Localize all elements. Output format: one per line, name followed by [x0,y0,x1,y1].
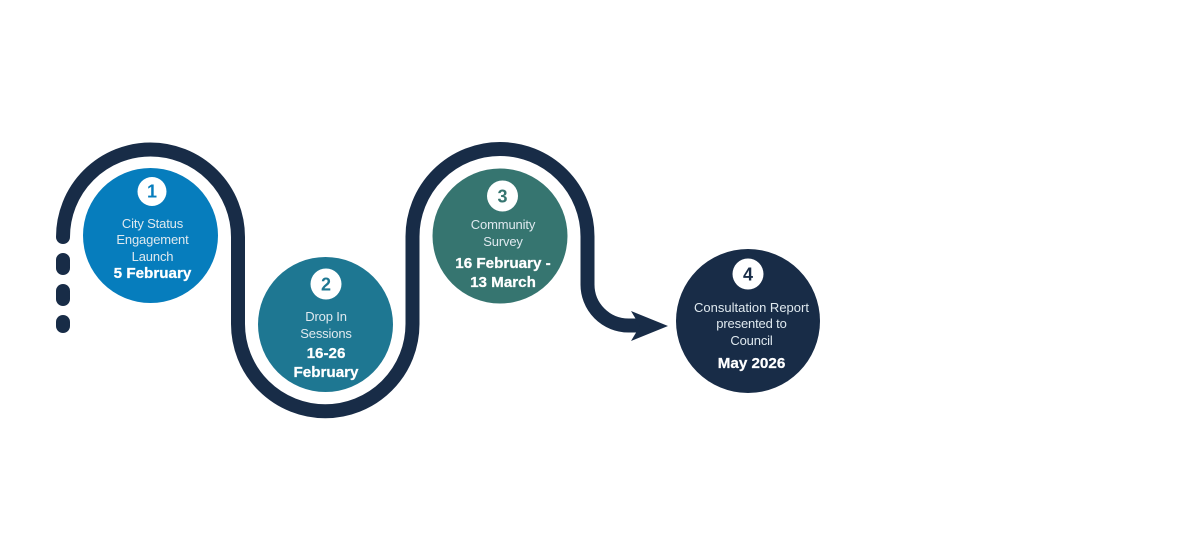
step 2: 16-26 [307,345,345,362]
step 3: 3 [497,186,508,206]
step 2: 2 [321,274,331,294]
step 3: Community [471,217,536,232]
step 4: 4 [743,264,753,284]
step 2: Sessions [300,326,352,341]
step 4: Consultation Report [694,300,809,315]
step 1: 5 February [114,265,192,282]
winding path [63,149,645,411]
step 4: Council [730,333,773,348]
step 4: presented to [716,316,787,331]
step 2 [258,257,393,392]
step 3: Survey [483,234,523,249]
dashed path start [56,253,70,333]
step 1: City Status [122,216,184,231]
step 1: Engagement [116,232,189,247]
step 3: 13 March [470,274,536,291]
step 3: 16 February - [455,255,551,272]
step 3 [432,168,568,304]
step 2: Drop In [305,309,347,324]
step 1 [83,168,218,303]
step 1: Launch [132,249,173,264]
step 2: February [294,364,359,381]
arrow head [631,311,668,341]
step 4 [676,249,820,393]
step 4: May 2026 [718,355,785,372]
step 1: 1 [147,182,157,202]
